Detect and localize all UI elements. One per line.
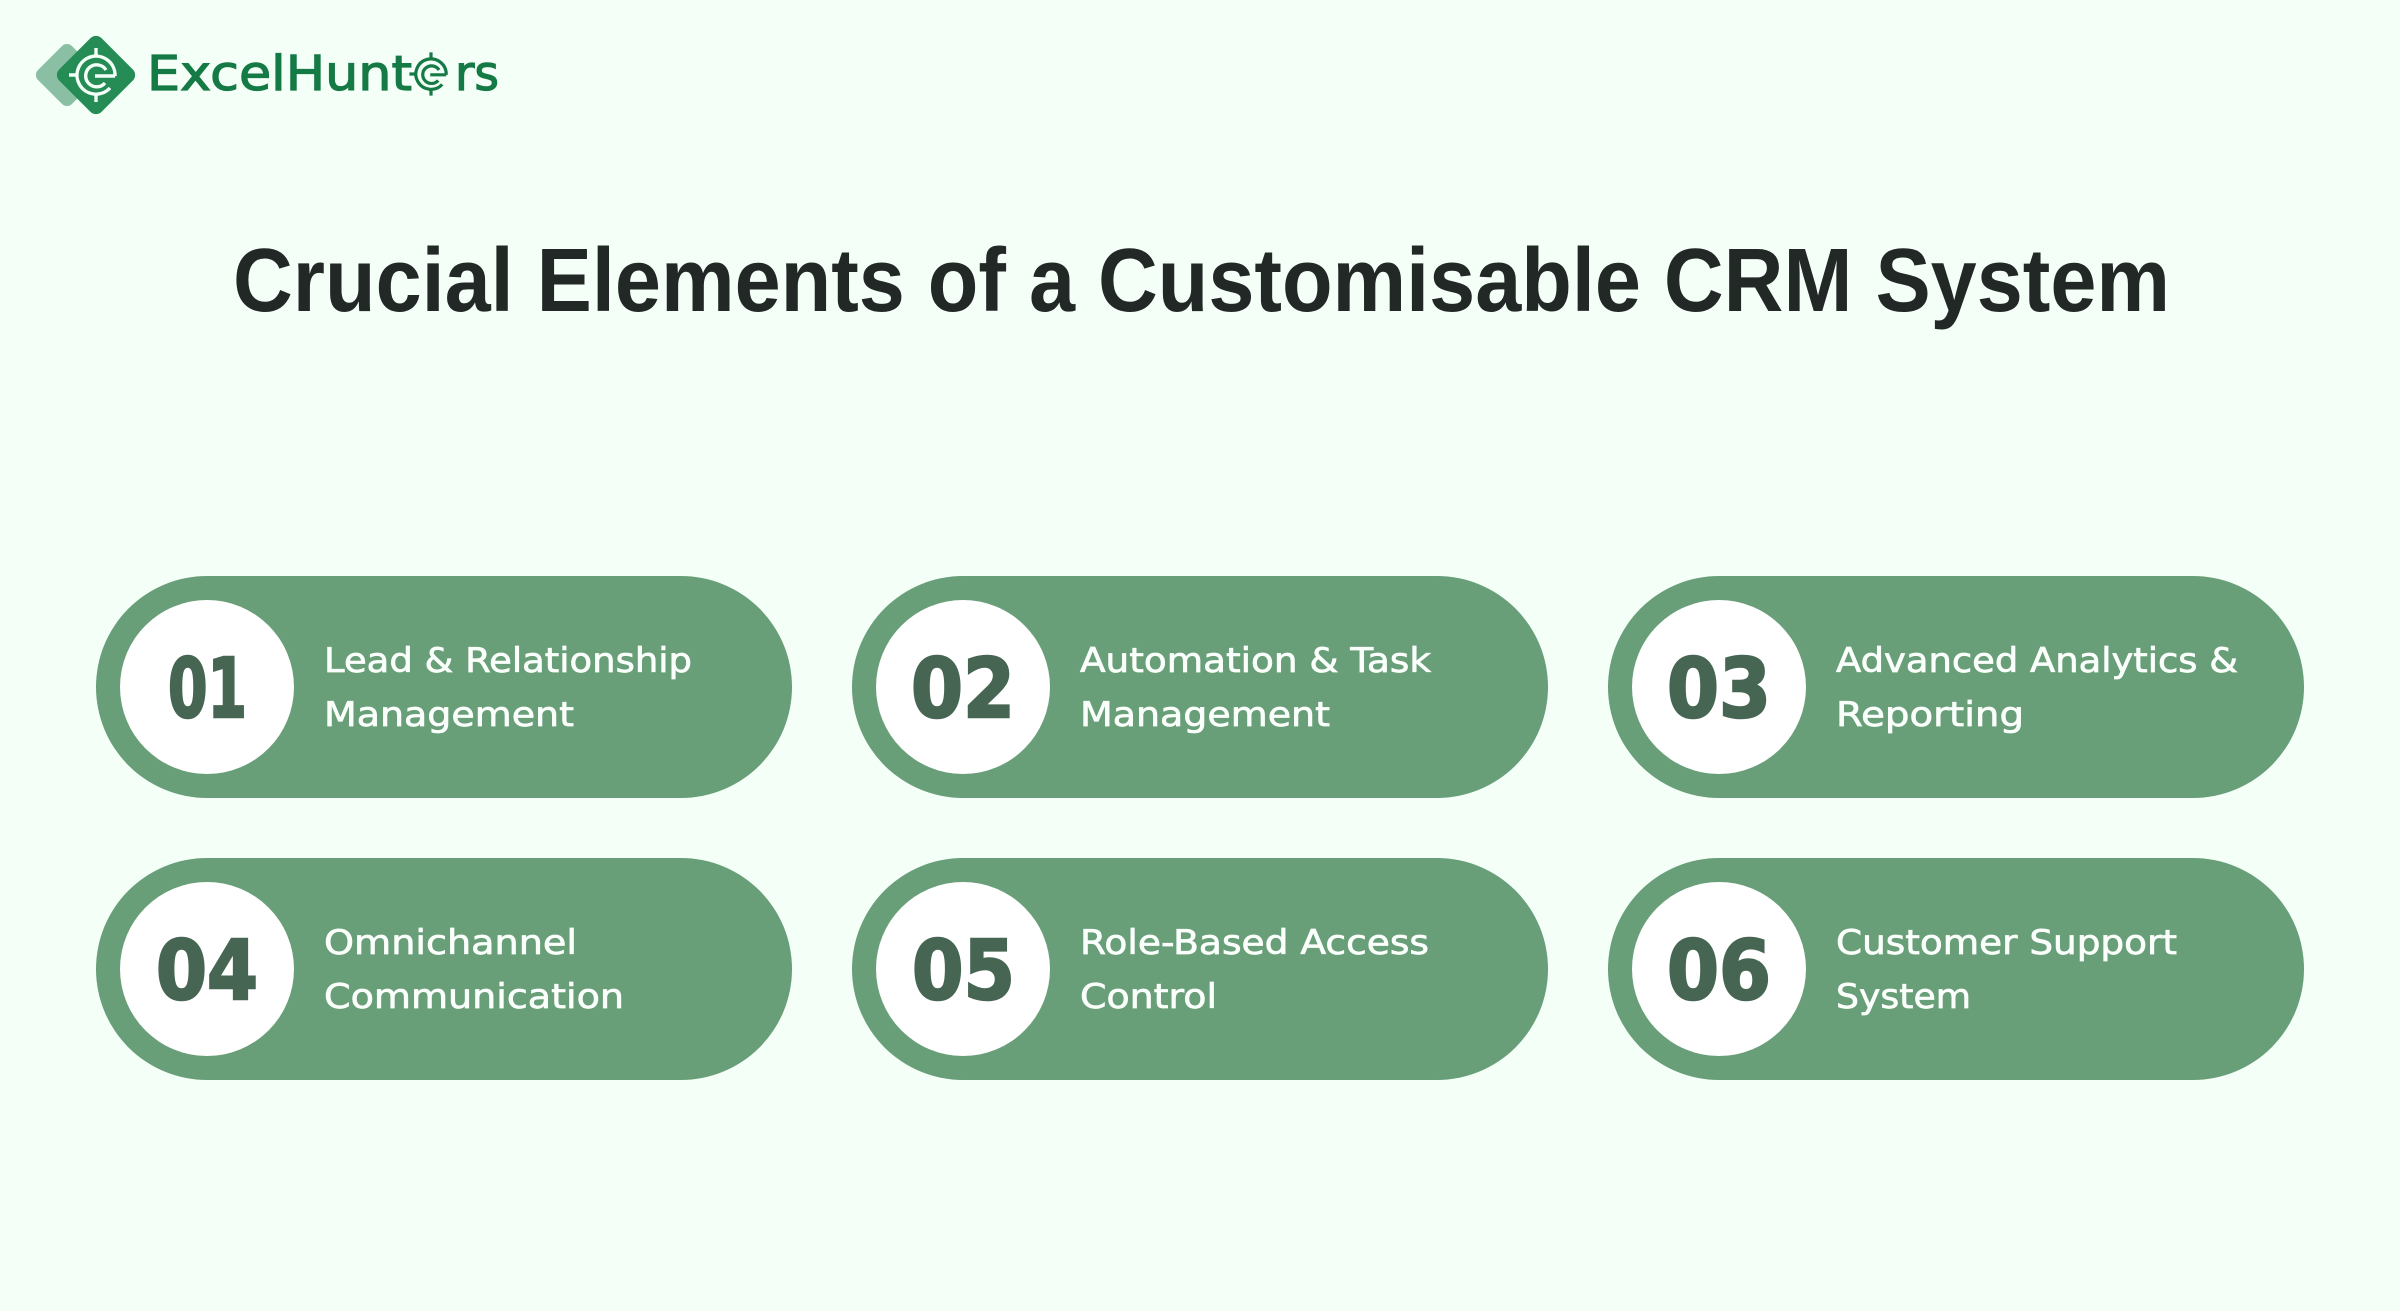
label 06: System (1836, 977, 1971, 1017)
panel: item 03 (1608, 576, 2304, 798)
label 02: Management (1080, 695, 1330, 735)
number 01: 01 (168, 642, 247, 737)
label 05: Role-Based Access (1080, 923, 1429, 963)
label 04: Communication (324, 977, 624, 1017)
panel: item 01 (96, 576, 792, 798)
label 05: Control (1080, 977, 1217, 1017)
number 02: 02 (911, 642, 1015, 737)
logo (33, 33, 499, 117)
panel: item 05 (852, 858, 1548, 1080)
icon: dark diamond (54, 33, 138, 117)
number 04: 04 (156, 924, 258, 1019)
label 03: Advanced Analytics & (1836, 641, 2238, 681)
icon: target letter e (69, 48, 115, 102)
number 03: 03 (1667, 642, 1771, 737)
label 04: Omnichannel (324, 923, 577, 963)
label 03: Reporting (1836, 695, 2024, 735)
panel: item 02 (852, 576, 1548, 798)
label 01: Management (324, 695, 574, 735)
icon: wordmark target letter (409, 52, 446, 96)
label 06: Customer Support (1836, 923, 2177, 963)
title: Crucial Elements of a Customisable CRM System (233, 231, 2170, 331)
label 02: Automation & Task (1080, 641, 1431, 681)
panel: item 06 (1608, 858, 2304, 1080)
panel: item 04 (96, 858, 792, 1080)
logo wordmark end: rs (455, 46, 499, 102)
icon: light diamond (33, 41, 101, 109)
number 06: 06 (1667, 924, 1771, 1019)
logo wordmark start: ExcelHunt (147, 46, 412, 102)
number 05: 05 (912, 924, 1015, 1019)
label 01: Lead & Relationship (324, 641, 692, 681)
